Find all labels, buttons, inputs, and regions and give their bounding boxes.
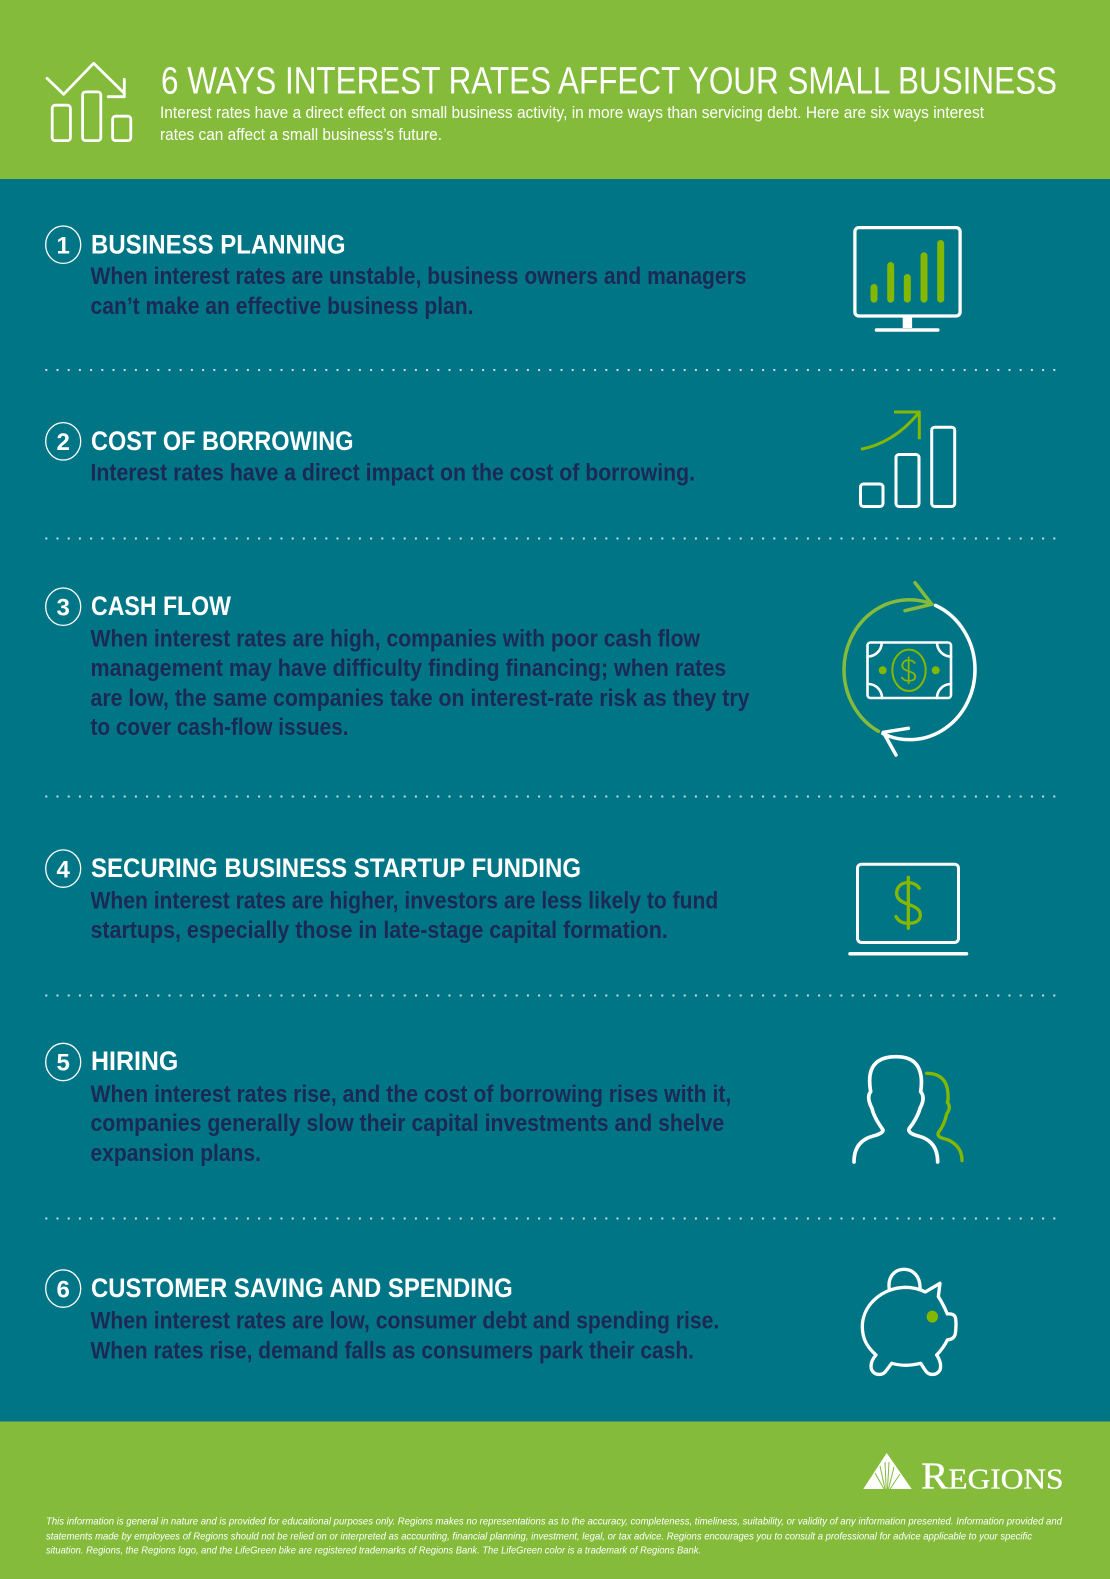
body text 3 [90,626,750,741]
body text 6: When rates rise, demand falls as consumers park their cash. [90,1338,694,1364]
divider [45,369,1059,371]
body text 1: When interest rates are unstable, business owners and managers [90,263,746,290]
icon: piggy bank [862,1269,956,1374]
icon: two people [854,1057,962,1162]
heading: hiring: HIRING [91,1046,178,1076]
number badge 5 [46,1043,81,1081]
body text 3: are low, the same companies take on interest-rate risk as they try [90,685,750,712]
divider [45,994,1059,996]
body text 3: When interest rates are high, companies with poor cash flow [90,626,700,652]
panel: item 6 customer saving and spending [46,1269,956,1374]
panel: item 2 cost of borrowing [46,412,955,506]
intro text: Interest rates have a direct effect on small business activity, in more ways than servicing debt. Here are six ways interest [160,103,984,122]
body text 4: When interest rates are higher, investors are less likely to fund [90,888,718,914]
disclaimer: statements made by employees of Regions should not be relied on or interpreted as accounting, financial planning, investment, legal, or tax advice. Regions encourages you to consult a professional for advice applicable to your specific [46,1530,1033,1542]
number badge 5: 5 [57,1050,70,1076]
body text 4 [90,888,718,944]
body text 5: expansion plans. [90,1140,261,1167]
footer band [0,1422,1110,1579]
heading: cost of borrowing: COST OF BORROWING [91,426,354,456]
icon: laptop with dollar [850,864,966,954]
body text 1 [90,263,746,320]
body text 5: companies generally slow their capital investments and shelve [90,1110,724,1137]
number badge 2: 2 [57,429,70,456]
heading: cash flow: CASH FLOW [91,591,231,621]
number badge 4: 4 [57,856,71,884]
panel: item 3 cash flow [46,583,975,755]
icon: rising bars with arrow [860,412,955,506]
icon: monitor with bars [855,228,960,330]
divider [45,796,1059,798]
number badge 3 [46,588,81,625]
number badge 1: 1 [57,232,70,260]
heading: customer saving and spending: CUSTOMER SAVING AND SPENDING [91,1273,513,1303]
body text 1: can’t make an effective business plan. [90,293,474,320]
body text 3: to cover cash-flow issues. [90,714,348,741]
heading: securing business startup funding: SECURING BUSINESS STARTUP FUNDING [91,853,581,883]
panel: item 1 business planning [46,226,960,330]
number badge 6 [46,1270,81,1307]
body text 6: When interest rates are low, consumer debt and spending rise. [90,1308,719,1334]
panel: item 5 hiring [46,1043,962,1167]
divider [45,538,1059,540]
icon: cash cycle [844,583,975,755]
number badge 1 [46,226,81,263]
panel: item 4 startup funding [46,850,966,954]
header band [0,0,1110,179]
disclaimer: situation. Regions, the Regions logo, and the LifeGreen bike are registered trademarks of Regions Bank. The LifeGreen color is a trademark of Regions Bank. [46,1544,701,1556]
number badge 2 [46,423,81,460]
logo: regions [863,1453,1064,1498]
body text 6 [90,1308,719,1364]
divider [45,1218,1059,1220]
body text 3: management may have difficulty finding financing; when rates [90,655,726,682]
body text 2: Interest rates have a direct impact on the cost of borrowing. [90,460,695,486]
disclaimer [46,1515,1063,1556]
intro text [160,103,984,144]
number badge 4 [46,850,81,887]
body text 5: When interest rates rise, and the cost of borrowing rises with it, [90,1081,731,1108]
intro text: rates can affect a small business’s future. [160,125,442,144]
heading: business planning: BUSINESS PLANNING [91,230,346,260]
body text 5 [90,1081,731,1167]
icon: header bar chart with arrow [47,63,131,141]
number badge 6: 6 [57,1276,70,1304]
number badge 3: 3 [57,594,70,622]
body text 4: startups, especially those in late-stage capital formation. [90,917,668,944]
logo: regions: REGIONS [921,1456,1064,1498]
